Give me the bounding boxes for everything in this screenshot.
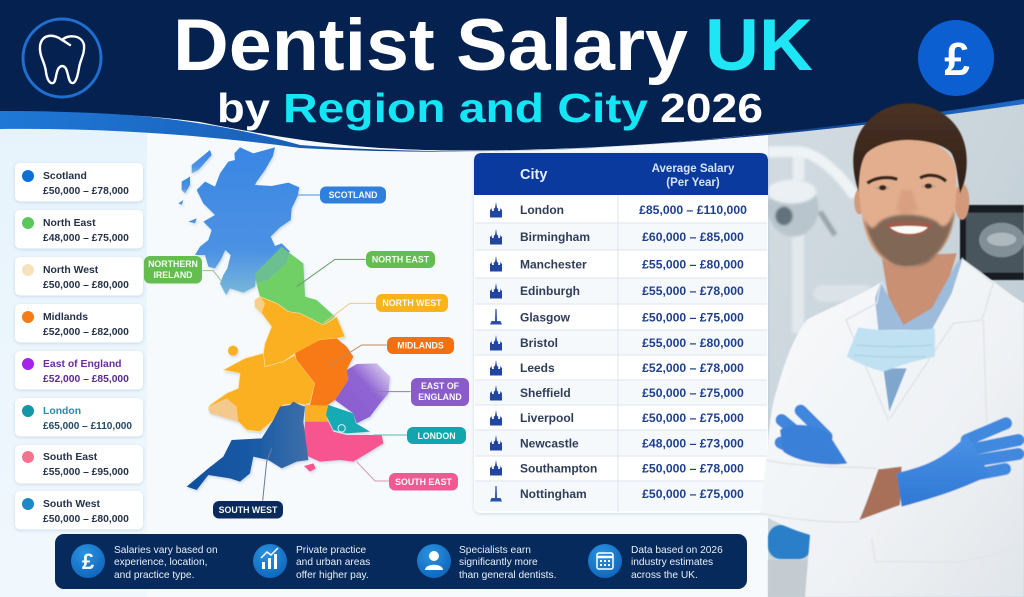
map label: Midlands — [387, 337, 454, 354]
eyebrows — [867, 178, 897, 183]
legend: South East — [15, 445, 143, 484]
left glove — [781, 411, 827, 455]
row: Sheffield: £50,000 – £75,000 — [642, 386, 744, 400]
row: Manchester: £55,000 – £80,000 — [642, 258, 744, 272]
hair — [853, 103, 967, 193]
row: Glasgow: Glasgow — [520, 310, 571, 324]
note: data source: across the UK. — [631, 570, 698, 581]
table header — [474, 153, 768, 195]
region: Midlands — [295, 338, 353, 406]
row: Leeds — [490, 360, 744, 376]
table header: Average Salary — [652, 163, 735, 175]
legend: North West: North West — [43, 265, 99, 276]
map label: East of England: ENGLAND — [418, 392, 462, 402]
legend: North West — [15, 257, 143, 296]
mouth — [886, 221, 932, 237]
legend: South East: South East — [43, 452, 98, 463]
header banner — [0, 0, 1024, 151]
legend: South East: £55,000 – £95,000 — [43, 467, 129, 478]
row: Bristol: £55,000 – £80,000 — [642, 336, 744, 350]
map label: North East — [366, 251, 435, 268]
row: Bristol: Bristol — [520, 336, 558, 350]
title line 2 — [217, 85, 763, 131]
map label: East of England: EAST OF — [421, 381, 460, 391]
map label: Northern Ireland: IRELAND — [153, 270, 193, 280]
face — [859, 138, 956, 268]
region legend — [15, 163, 143, 530]
row: Newcastle: Newcastle — [520, 436, 579, 450]
eyes — [875, 186, 890, 190]
note: specialists: significantly more — [459, 557, 538, 568]
map label: North East: NORTH EAST — [372, 254, 430, 264]
note: data source: Data based on 2026 — [631, 545, 723, 556]
neck — [882, 253, 957, 327]
coat folds — [760, 320, 1024, 562]
map label: Scotland — [320, 186, 386, 204]
pound badge: £ — [944, 33, 970, 85]
pound badge — [918, 20, 994, 96]
legend: Scotland: £50,000 – £78,000 — [43, 186, 129, 197]
row: Southampton: £50,000 – £78,000 — [642, 462, 744, 476]
map label: Northern Ireland — [144, 256, 202, 284]
legend: South West: South West — [43, 499, 100, 510]
legend: East of England: East of England — [43, 359, 122, 370]
region: London — [326, 405, 370, 433]
note: private practice: Private practice — [296, 545, 367, 556]
row: London: £85,000 – £110,000 — [639, 203, 747, 217]
row: Edinburgh: £55,000 – £78,000 — [642, 284, 744, 298]
row: London — [490, 202, 747, 218]
map label: South East: SOUTH EAST — [395, 477, 452, 487]
map label: Midlands: MIDLANDS — [397, 340, 444, 350]
row: Leeds: Leeds — [520, 361, 555, 375]
row: Glasgow: £50,000 – £75,000 — [642, 310, 744, 324]
map label: South West — [213, 501, 283, 518]
row: Birmingham — [490, 229, 744, 244]
lab coat — [760, 258, 1024, 597]
legend: South West — [15, 491, 143, 530]
region: Wales and West Midlands — [208, 353, 315, 432]
map label: Northern Ireland: NORTHERN — [148, 259, 198, 269]
legend: Midlands — [15, 304, 143, 342]
map label: London: LONDON — [417, 431, 456, 441]
row: Newcastle — [490, 435, 744, 450]
row: London: London — [520, 203, 564, 217]
clinic photo background — [767, 90, 1024, 597]
map label: East of England — [411, 378, 469, 406]
leader lines — [202, 195, 411, 501]
legend: East of England — [15, 351, 143, 390]
title line 2: Region and City — [283, 85, 648, 131]
map label: London — [407, 427, 466, 444]
map label: South East — [389, 473, 458, 490]
row: Glasgow — [490, 309, 744, 324]
note: private practice: and urban areas — [296, 557, 370, 568]
row: Newcastle: £48,000 – £73,000 — [642, 436, 744, 450]
map label: Scotland: SCOTLAND — [329, 190, 377, 200]
forearm — [859, 467, 902, 520]
note: salaries vary: experience, location, — [114, 557, 207, 568]
row: Manchester: Manchester — [520, 258, 587, 272]
note: salaries vary: Salaries vary based on — [114, 545, 218, 556]
note: specialists — [417, 544, 556, 581]
salary table — [474, 153, 768, 513]
blue header swoosh — [0, 98, 1024, 152]
note: salaries vary: £ — [82, 549, 95, 574]
left background pane — [0, 110, 147, 597]
region: North West — [255, 297, 345, 367]
row: Sheffield: Sheffield — [520, 386, 571, 400]
region: Southern Uplands — [255, 247, 290, 284]
map label: North West — [376, 294, 448, 312]
region: Scotland — [178, 147, 299, 295]
nose shadow — [896, 190, 918, 215]
region: East of England — [335, 363, 390, 423]
region: South West — [187, 402, 308, 490]
UK map — [178, 147, 411, 501]
map label: South West: SOUTH WEST — [219, 505, 278, 515]
row: Nottingham: Nottingham — [520, 487, 587, 501]
map label: North West: NORTH WEST — [382, 298, 442, 308]
row: Sheffield — [490, 385, 744, 400]
row: Liverpool — [490, 410, 744, 426]
note: salaries vary — [71, 544, 218, 581]
row: Southampton: Southampton — [520, 462, 597, 476]
row: Southampton — [490, 460, 744, 476]
legend: East of England: £52,000 – £85,000 — [43, 374, 129, 385]
dental lamp — [767, 152, 873, 333]
legend: Scotland: Scotland — [43, 171, 87, 182]
row: Birmingham: £60,000 – £85,000 — [642, 230, 744, 244]
legend: North East — [15, 210, 143, 248]
footer notes bar — [55, 534, 747, 589]
note: private practice: offer higher pay. — [296, 570, 369, 581]
title line 2: 2026 — [660, 85, 763, 131]
row: Edinburgh: Edinburgh — [520, 284, 580, 298]
row: Manchester — [490, 256, 744, 272]
dentist portrait — [760, 103, 1024, 597]
title line 2: by — [217, 85, 270, 131]
x-ray viewer — [960, 205, 1024, 280]
coat lapels — [846, 258, 993, 420]
note: specialists: than general dentists. — [459, 570, 556, 581]
legend: Midlands: £52,000 – £82,000 — [43, 327, 129, 338]
row: Nottingham: £50,000 – £75,000 — [642, 487, 744, 501]
row: Bristol — [490, 335, 744, 350]
row: Birmingham: Birmingham — [520, 230, 590, 244]
note: private practice — [253, 544, 370, 581]
row: Leeds: £52,000 – £78,000 — [642, 361, 744, 375]
logo: tooth badge — [23, 19, 101, 97]
island: Anglesey — [228, 346, 238, 356]
region: South East — [303, 422, 383, 462]
row: Nottingham — [490, 486, 744, 502]
legend: North West: £50,000 – £80,000 — [43, 280, 129, 291]
region: North East — [257, 253, 335, 325]
legend: North East: £48,000 – £75,000 — [43, 233, 129, 244]
legend: South West: £50,000 – £80,000 — [43, 514, 129, 525]
note: specialists: Specialists earn — [459, 545, 531, 556]
row: Edinburgh — [490, 283, 744, 298]
right glove — [967, 423, 1018, 475]
legend: Midlands: Midlands — [43, 312, 88, 323]
table header: (Per Year) — [666, 177, 720, 189]
legend: London: £65,000 – £110,000 — [43, 421, 132, 432]
ears — [854, 189, 864, 214]
row: Liverpool: £50,000 – £75,000 — [642, 411, 744, 425]
shirt collar — [875, 257, 963, 330]
note: salaries vary: and practice type. — [114, 570, 194, 581]
legend: London: London — [43, 406, 81, 417]
note: data source — [588, 544, 723, 581]
legend: North East: North East — [43, 218, 96, 229]
legend: London — [15, 398, 143, 436]
blue dental chair — [768, 525, 811, 597]
note: data source: industry estimates — [631, 557, 713, 568]
beard — [864, 210, 955, 267]
title line 1: Dentist Salary — [173, 5, 688, 86]
row: Liverpool: Liverpool — [520, 411, 574, 425]
legend: Scotland — [15, 163, 143, 202]
face mask — [847, 327, 935, 372]
title line 1: UK — [705, 5, 813, 86]
table header: City — [520, 167, 547, 183]
